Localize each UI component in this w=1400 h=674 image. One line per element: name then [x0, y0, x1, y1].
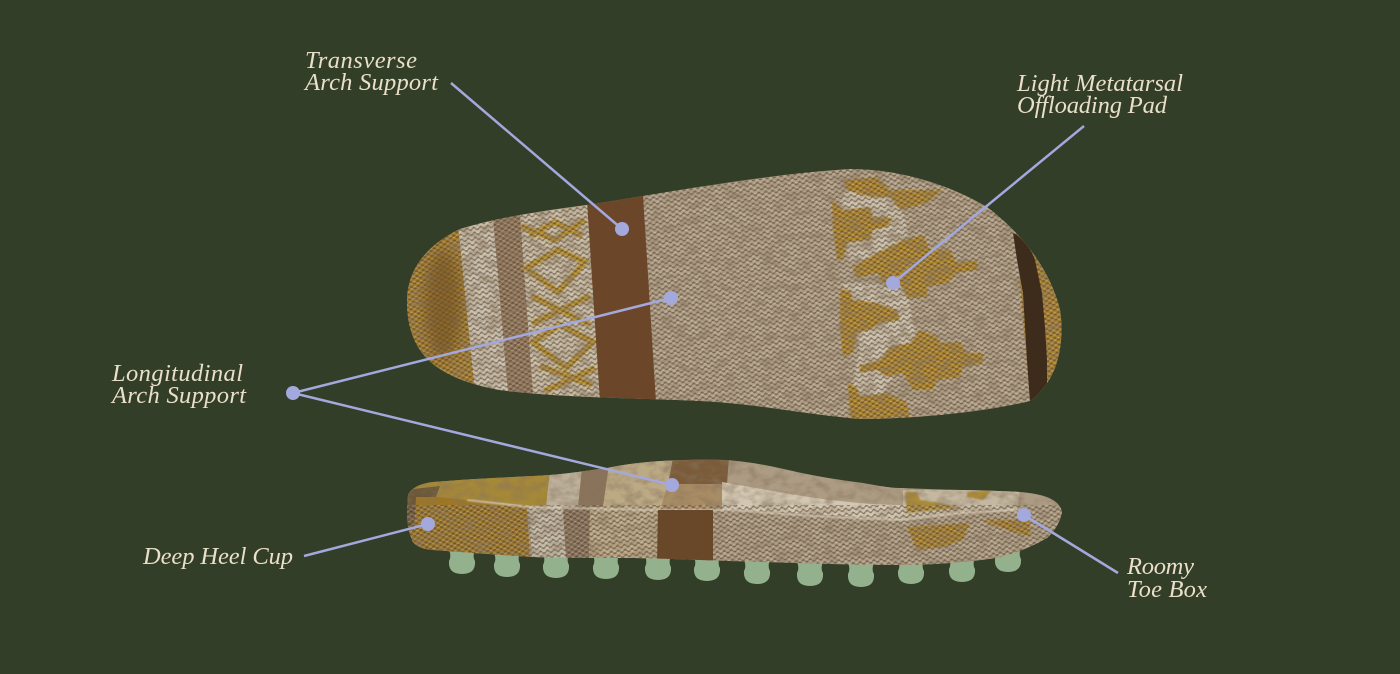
- patterned cream band: [520, 205, 602, 398]
- inner face: heel gold: [408, 474, 552, 507]
- inner face: grey band: [578, 465, 609, 507]
- side wall: dark brown band: [657, 510, 713, 563]
- heel mottling: [425, 250, 461, 360]
- dark brown band: [587, 195, 656, 402]
- inner face: forefoot cream: [903, 490, 1020, 520]
- label: Arch Support: [303, 69, 439, 96]
- illustration: rubber sole nubs: [449, 548, 1021, 587]
- toe dark stripe: [1013, 233, 1047, 402]
- label: Light Metatarsal: [1016, 70, 1183, 97]
- callout: deep heel cup: [142, 517, 435, 570]
- leader line: [1017, 508, 1118, 573]
- callout: transverse arch support: [303, 47, 629, 236]
- inner face: cream band: [546, 472, 582, 507]
- label: Toe Box: [1127, 576, 1207, 603]
- label: Roomy: [1126, 553, 1194, 580]
- inner face: gold flecks: [905, 490, 992, 513]
- callout: light metatarsal offloading pad: [886, 70, 1183, 290]
- knit texture: [400, 160, 1070, 425]
- label: Deep Heel Cup: [142, 543, 293, 570]
- label: Longitudinal: [111, 360, 243, 387]
- illustration: knit footbed, side view: [407, 460, 1062, 565]
- forefoot light patches: [840, 190, 918, 395]
- side wall: grey band: [563, 507, 590, 560]
- knit texture: [400, 505, 1070, 570]
- inner face: cream zone near arch: [722, 482, 905, 520]
- leader lines: [286, 291, 679, 492]
- illustration: knit footbed, top view: [400, 160, 1075, 425]
- side wall: cream band: [529, 507, 566, 560]
- leader line: [886, 126, 1084, 290]
- forefoot gold pattern: [832, 177, 983, 420]
- cream band: [458, 218, 510, 392]
- side wall: pattern band: [589, 507, 657, 560]
- leader line: [304, 517, 435, 556]
- grey-brown band: [493, 215, 534, 395]
- toe gold crescent: [1016, 232, 1062, 400]
- gold zigzag pattern: [521, 220, 595, 391]
- side wall: heel gold: [407, 494, 530, 557]
- callout: longitudinal arch support: [110, 291, 679, 492]
- label: Transverse: [305, 47, 417, 74]
- leader line: [451, 83, 629, 236]
- rim highlight: [467, 500, 1017, 520]
- inner face: pattern band: [603, 458, 675, 509]
- inner face: brown band: [668, 458, 729, 484]
- label: Offloading Pad: [1017, 92, 1168, 119]
- side wall: forefoot gold: [907, 520, 1030, 550]
- inner face: brown fade: [660, 484, 727, 510]
- infographic canvas: [110, 52, 1207, 597]
- callout: roomy toe box: [1017, 508, 1207, 603]
- label: Arch Support: [110, 382, 247, 409]
- heel gold band: [407, 230, 476, 385]
- heel back edge: [405, 486, 440, 530]
